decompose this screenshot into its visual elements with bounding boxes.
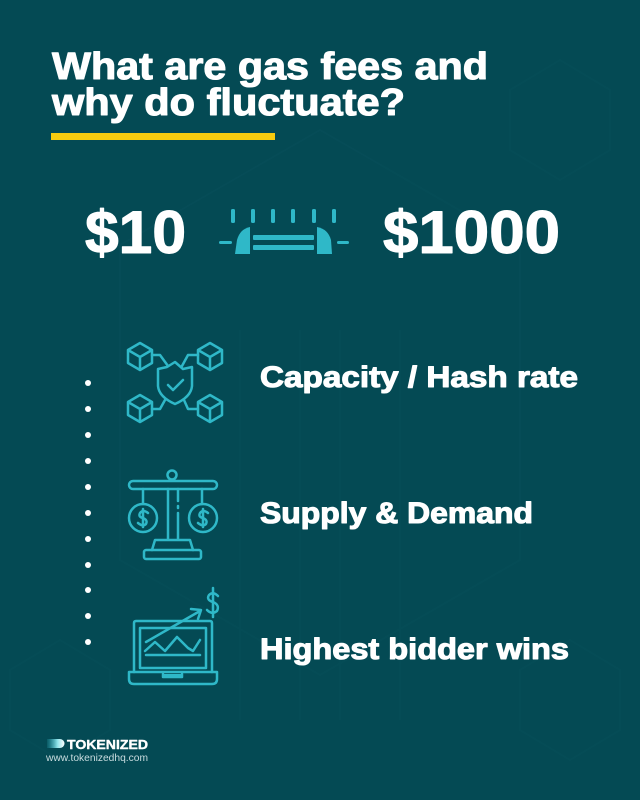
high price: $1000 bbox=[383, 199, 560, 266]
footer logo: TOKENIZED bbox=[67, 737, 148, 752]
title: why do fluctuate? bbox=[51, 82, 405, 124]
icon: logo mark bbox=[47, 739, 64, 748]
icon: blockchain shield bbox=[128, 343, 222, 422]
icon: balance scale bbox=[129, 470, 217, 559]
title: What are gas fees and bbox=[52, 46, 488, 88]
low price: $10 bbox=[85, 199, 186, 266]
icon: laptop chart bbox=[129, 588, 218, 684]
title underline bbox=[51, 133, 275, 140]
footer logo bbox=[45, 737, 148, 764]
title bbox=[51, 46, 488, 124]
icon: gas gauge bbox=[219, 209, 349, 254]
label: highest bidder: Highest bidder wins bbox=[260, 633, 569, 666]
footer logo: www.tokenizedhq.com bbox=[45, 753, 148, 764]
label: supply and demand: Supply & Demand bbox=[260, 497, 533, 530]
dotted timeline bbox=[85, 380, 91, 645]
label: capacity: Capacity / Hash rate bbox=[260, 361, 578, 394]
